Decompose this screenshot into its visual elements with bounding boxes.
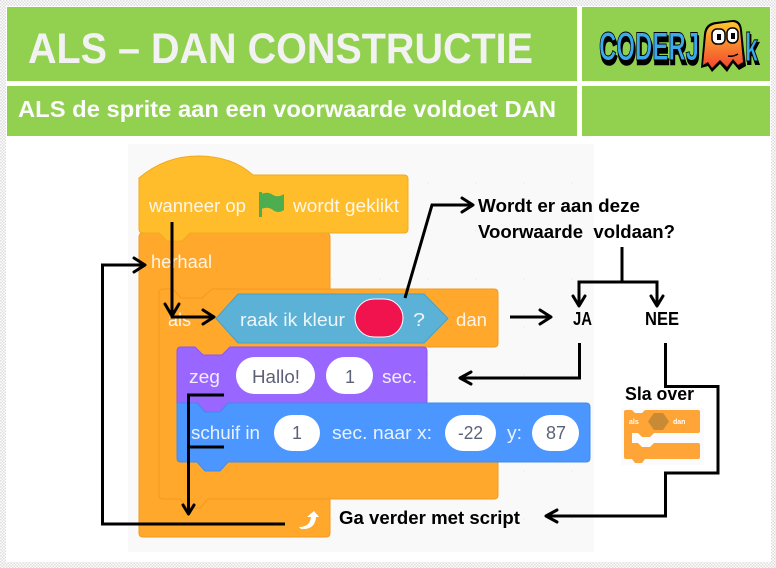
arrow: condition to question bbox=[405, 198, 473, 298]
title panel bbox=[7, 7, 577, 81]
condition block bbox=[216, 294, 448, 343]
input: -22: -22 bbox=[458, 423, 483, 443]
arrow: question to JA and NEE bbox=[573, 247, 663, 306]
repeat block bbox=[139, 233, 330, 537]
input: Hallo: Hallo! bbox=[252, 367, 300, 387]
icon: mini if block bbox=[621, 408, 704, 465]
arrow: start to als bbox=[165, 222, 214, 324]
say block bbox=[177, 347, 427, 412]
input: 1 bbox=[326, 357, 373, 394]
text: als: als bbox=[168, 310, 191, 330]
question text bbox=[478, 196, 675, 242]
label: Sla over: Sla over bbox=[625, 384, 694, 404]
label: NEE: NEE bbox=[645, 309, 679, 329]
input: 87 bbox=[532, 415, 579, 451]
text: sec naar x: sec. naar x: bbox=[332, 423, 432, 443]
text: sec: sec. bbox=[382, 367, 417, 387]
hat block bbox=[139, 156, 408, 241]
arrow: dan to JA bbox=[510, 310, 551, 324]
text: zeg: zeg bbox=[189, 367, 220, 387]
icon: mini if block: dan bbox=[673, 419, 685, 426]
input: -22 bbox=[445, 415, 496, 451]
text: schuif in: schuif in bbox=[191, 423, 260, 443]
text: dan: dan bbox=[456, 310, 487, 330]
icon: green flag bbox=[259, 192, 284, 217]
arrow: through blocks to loop end bbox=[183, 395, 224, 514]
question text: Wordt er aan deze bbox=[478, 196, 640, 216]
subtitle: ALS de sprite aan een voorwaarde voldoet DAN bbox=[18, 96, 556, 122]
logo: coderjoek: k bbox=[745, 26, 758, 70]
input: 1: 1 bbox=[292, 423, 302, 443]
text: y: y: bbox=[507, 423, 522, 443]
scratch script bbox=[139, 156, 590, 537]
arrow: loop back bbox=[102, 258, 285, 524]
text: raak ik kleur: raak ik kleur bbox=[240, 310, 345, 330]
if block bbox=[159, 289, 498, 508]
logo: coderjoek: k bbox=[746, 29, 759, 73]
icon: loop arrow bbox=[299, 511, 319, 529]
text: wordt geklikt: wordt geklikt bbox=[292, 196, 399, 216]
label: Ga verder met script: Ga verder met script bbox=[339, 508, 520, 528]
empty panel bbox=[582, 86, 770, 136]
glide block bbox=[177, 403, 590, 471]
input: 1: 1 bbox=[345, 367, 355, 387]
arrow: JA to zeg bbox=[460, 343, 580, 384]
input: Hallo bbox=[236, 357, 315, 394]
red colour swatch bbox=[355, 299, 403, 337]
logo: coderjoek: CODERJ bbox=[600, 29, 700, 73]
icon: mini if block: als bbox=[629, 419, 639, 426]
logo: coderjoek: CODERJ bbox=[599, 25, 699, 69]
text: herhaal: herhaal bbox=[151, 252, 212, 272]
subtitle panel bbox=[7, 86, 577, 136]
input: 87: 87 bbox=[546, 423, 566, 443]
title: ALS – DAN CONSTRUCTIE bbox=[28, 25, 533, 73]
text: question mark: ? bbox=[413, 310, 425, 330]
logo panel bbox=[582, 7, 770, 81]
text: wanneer op: wanneer op bbox=[148, 196, 246, 216]
arrow: NEE to continue script bbox=[546, 343, 718, 522]
question text: Voorwaarde voldaan? bbox=[478, 222, 675, 242]
input: 1 bbox=[274, 415, 320, 451]
script background panel bbox=[128, 144, 594, 552]
label: JA: JA bbox=[573, 309, 592, 329]
